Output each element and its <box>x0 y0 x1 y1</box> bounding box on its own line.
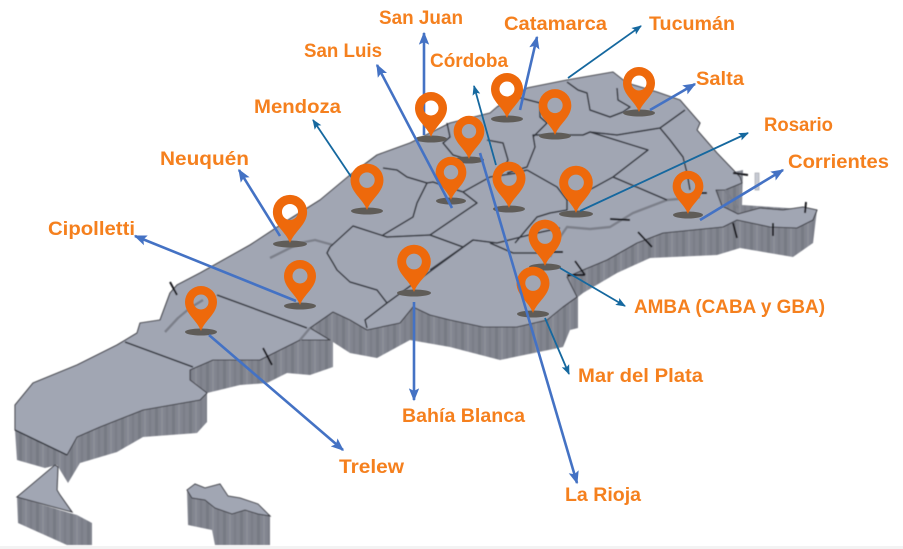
arrow: AMBA <box>560 268 625 306</box>
map: black border ticks <box>170 173 806 365</box>
map: rivers <box>165 190 738 340</box>
arrow: San Juan <box>423 33 425 135</box>
label: Trelew: Trelew <box>339 457 404 478</box>
label: Mar del Plata: Mar del Plata <box>578 366 703 387</box>
label: Córdoba: Córdoba <box>430 51 508 72</box>
map: province borders <box>15 82 690 455</box>
label: Neuquén: Neuquén <box>160 149 249 170</box>
arrow: Trelew <box>209 335 343 450</box>
label: Mendoza: Mendoza <box>254 97 341 118</box>
map: top surface <box>15 72 817 455</box>
label: Cipolletti: Cipolletti <box>48 219 135 240</box>
label: San Luis: San Luis <box>304 41 382 62</box>
arrow: Salta <box>650 84 695 110</box>
label: Salta: Salta <box>696 69 744 90</box>
arrow: Bahía Blanca <box>413 302 415 400</box>
arrow: Neuquén <box>239 170 280 236</box>
map: extruded sides <box>15 170 817 545</box>
arrow: Catamarca <box>520 37 537 110</box>
arrow: Tucumán <box>568 26 641 78</box>
label: La Rioja: La Rioja <box>565 485 641 506</box>
label: Catamarca: Catamarca <box>504 14 607 35</box>
arrow: Córdoba <box>474 86 496 165</box>
arrow: Mar del Plata <box>545 318 569 374</box>
arrow: Rosario <box>580 133 748 211</box>
arrow: Cipolletti <box>135 236 296 301</box>
label: Bahía Blanca: Bahía Blanca <box>402 406 525 427</box>
arrow: La Rioja <box>480 153 577 483</box>
location pins <box>185 67 703 331</box>
arrow: Corrientes <box>700 170 783 220</box>
label: AMBA (CABA y GBA): AMBA (CABA y GBA) <box>634 297 825 318</box>
arrow: Mendoza <box>313 120 352 178</box>
pin shadows <box>185 110 703 336</box>
label: Corrientes: Corrientes <box>788 152 889 173</box>
base map with sides, surface and borders <box>15 72 817 545</box>
label: San Juan: San Juan <box>379 8 463 29</box>
label: Tucumán: Tucumán <box>649 14 735 35</box>
map: Malvinas islands <box>187 484 270 545</box>
map: Tierra del Fuego <box>17 465 72 512</box>
arrow: San Luis <box>377 65 452 208</box>
bottom edge band <box>0 546 903 549</box>
label: Rosario: Rosario <box>764 115 833 136</box>
